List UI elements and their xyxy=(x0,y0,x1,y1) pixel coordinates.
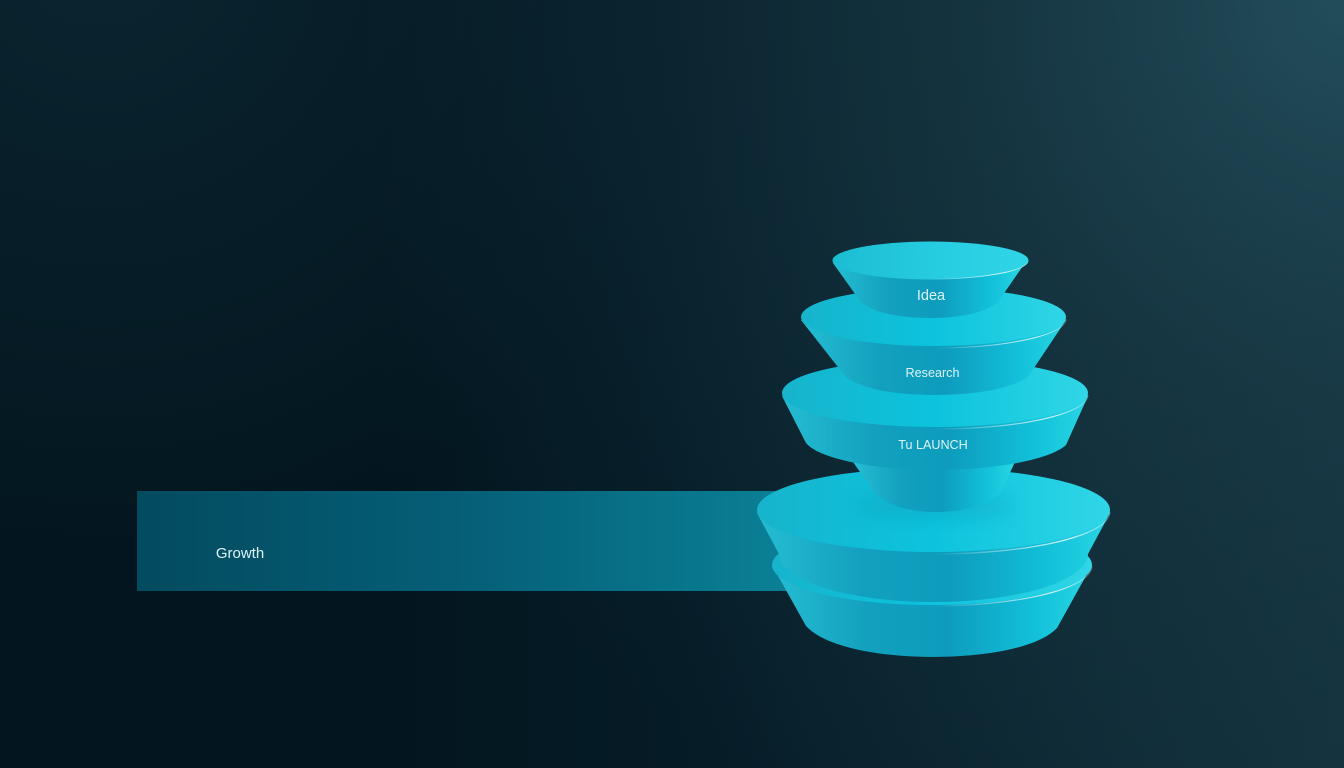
disc 3 xyxy=(782,359,1088,470)
disc 4 xyxy=(757,468,1110,602)
disc 5: base xyxy=(772,525,1092,657)
small cone under disc 3 xyxy=(853,462,1015,512)
label: Research: Research xyxy=(906,366,959,380)
disc 2 xyxy=(801,288,1066,395)
panel: growth bar xyxy=(137,491,797,591)
label: Growth: Growth xyxy=(216,545,264,562)
label: Idea: Idea xyxy=(917,288,946,304)
disc 1 xyxy=(832,242,1028,318)
chart: stacked funnel discs xyxy=(757,242,1110,657)
label: launch: Tu LAUNCH xyxy=(898,438,968,452)
